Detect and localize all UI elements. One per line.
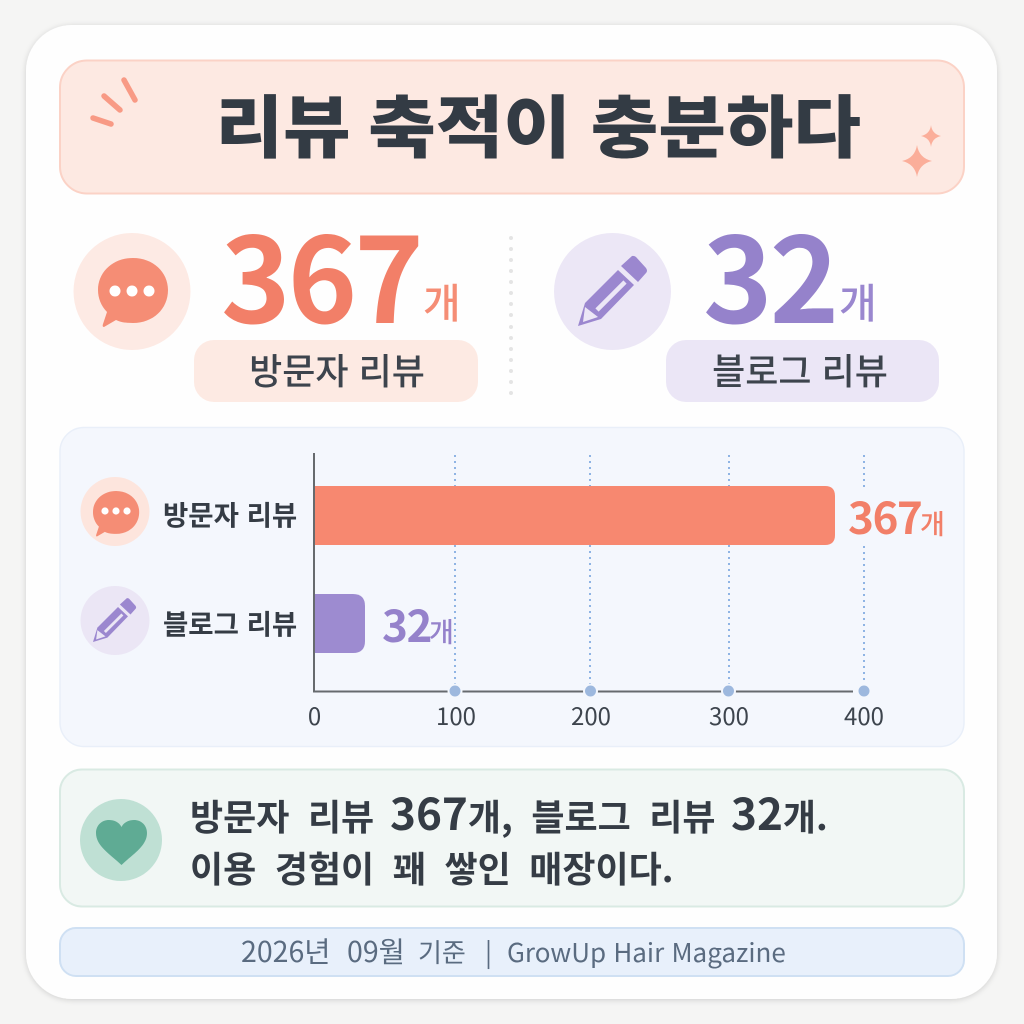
value label: 32: 개 (429, 611, 454, 650)
pill label (666, 340, 939, 402)
axis labels: 300 (709, 697, 749, 732)
axis labels: 0 (308, 697, 321, 732)
summary text: 367 (390, 779, 468, 843)
panel: visitor review stat (74, 186, 478, 402)
icon: sparkles (902, 125, 941, 177)
value label: 32: 32 (382, 591, 431, 655)
axis labels: 100 (436, 697, 476, 732)
icon: chart speech bubble (80, 477, 150, 546)
icon: pencil (554, 233, 671, 350)
icon: heart (80, 799, 162, 881)
value label: 367: 367 (848, 483, 921, 547)
summary text: 32 (731, 779, 783, 843)
summary text: 이용 경험이 꽤 쌓인 매장이다. (190, 841, 674, 893)
icon: speech bubble (74, 233, 190, 350)
value label: 367: 개 (920, 503, 945, 542)
icon: burst lines (93, 80, 135, 124)
bar: visitor reviews (315, 486, 835, 545)
footer: 09월 (347, 930, 405, 971)
title: 리뷰 (215, 74, 351, 172)
unit: 개 (423, 270, 461, 330)
axis labels: 200 (571, 697, 611, 732)
axis labels (308, 697, 884, 732)
panel: title banner (60, 60, 964, 194)
panel: bar chart (60, 428, 964, 746)
footer: | (485, 933, 492, 970)
title: 축적이 (368, 74, 571, 172)
panel: summary callout (60, 770, 964, 906)
axis labels: 400 (844, 697, 884, 732)
pill label: 방문자 리뷰 (249, 343, 425, 395)
footer: 2026년 (241, 930, 330, 971)
pill label (194, 340, 478, 402)
bar: blog reviews (315, 594, 365, 653)
row label: visitor: 방문자 리뷰 (163, 493, 297, 533)
panel: blog review stat (554, 186, 939, 402)
summary text: 개, 블로그 리뷰 (468, 789, 734, 841)
title: 충분하다 (591, 74, 861, 172)
summary text: 개. (783, 789, 828, 841)
number: 32: 32 (703, 186, 836, 357)
axis tick markers (448, 684, 870, 698)
footer (60, 928, 964, 976)
pill label: 블로그 리뷰 (712, 343, 888, 395)
icon: chart pencil (80, 586, 150, 655)
unit: 개 (839, 270, 877, 330)
footer: GrowUp Hair Magazine (507, 933, 786, 970)
number: 367: 367 (221, 186, 421, 357)
summary text: 방문자 리뷰 (190, 789, 393, 841)
footer: 기준 (418, 933, 466, 970)
row label: blog: 블로그 리뷰 (163, 602, 297, 642)
